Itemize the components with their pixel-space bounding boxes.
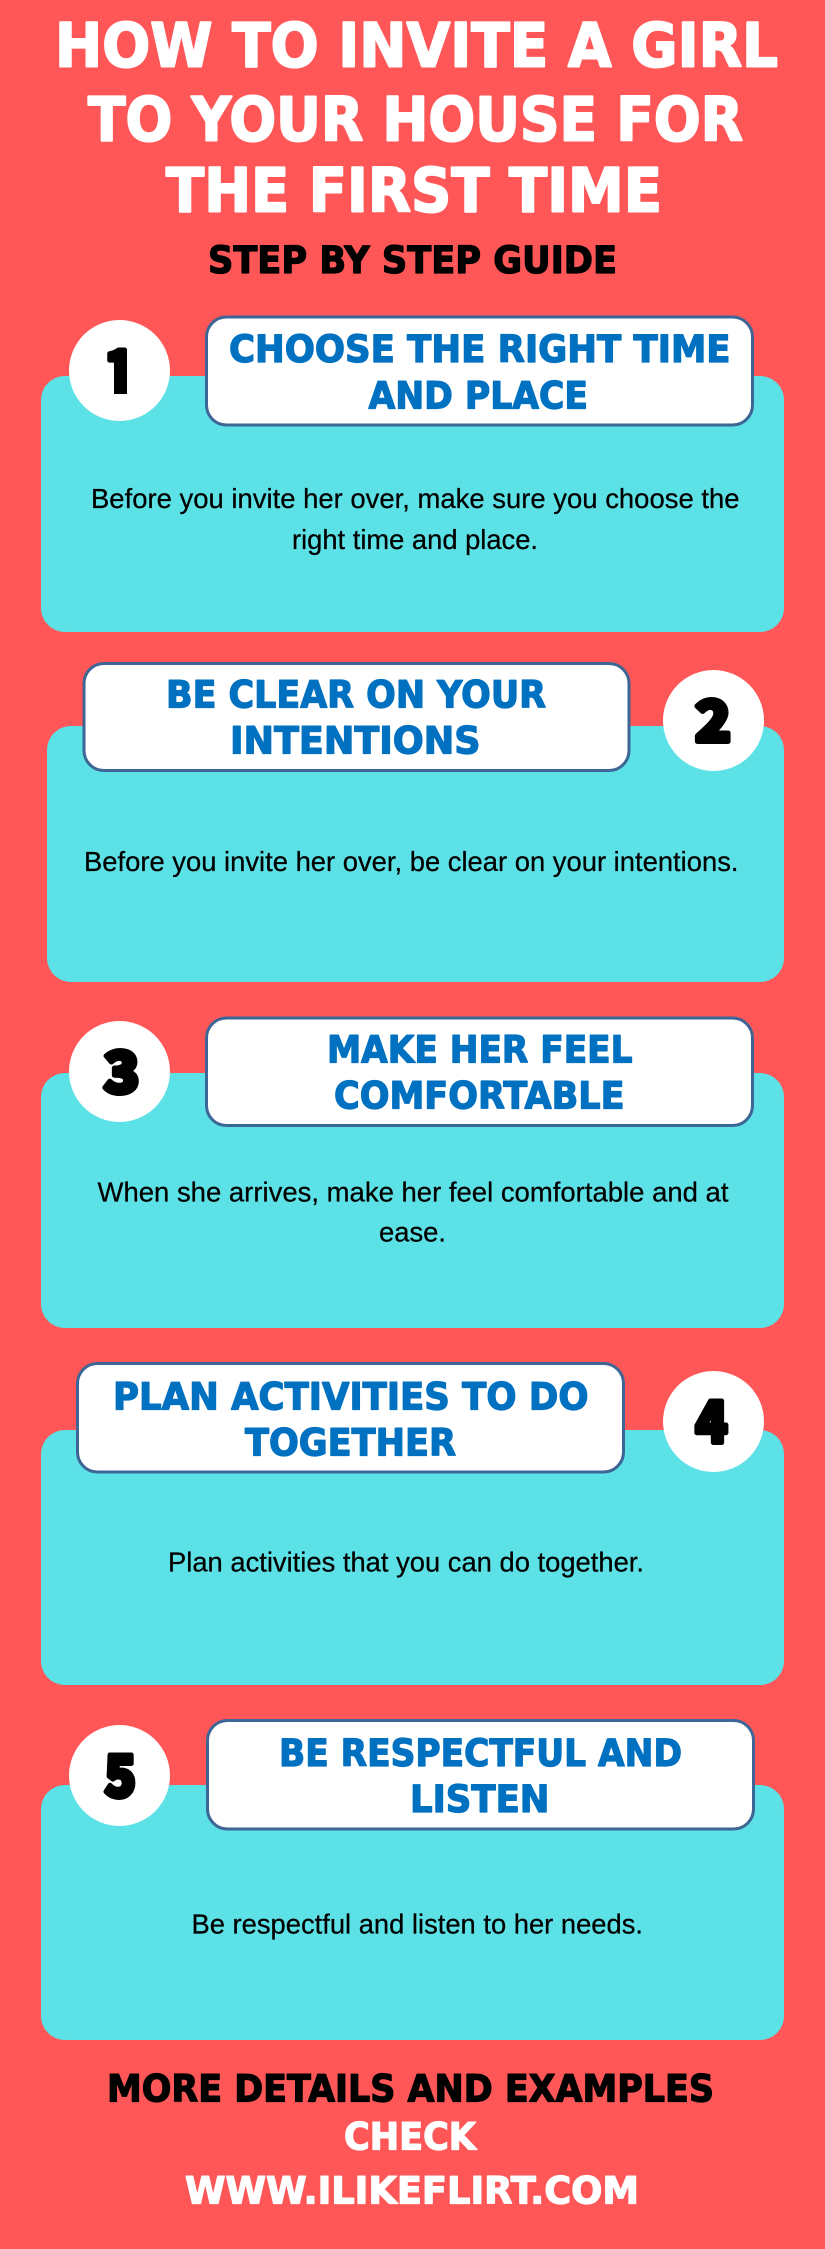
heading box 4: PLAN ACTIVITIES TO DO <box>113 1374 588 1418</box>
title: HOW TO INVITE A GIRL <box>55 12 778 82</box>
heading box 3: COMFORTABLE <box>334 1074 624 1118</box>
footer: more details: MORE DETAILS AND EXAMPLES <box>107 2066 714 2110</box>
number badge 2 <box>663 670 764 771</box>
footer: check: CHECK <box>344 2114 478 2158</box>
body text 4: Plan activities that you can do together. <box>168 1546 644 1578</box>
panel: step 1 <box>41 317 784 632</box>
number badge 4: 4 <box>696 1378 728 1460</box>
number badge 4 <box>663 1371 764 1472</box>
heading box 3: MAKE HER FEEL <box>327 1028 632 1072</box>
heading box 2: BE CLEAR ON YOUR <box>166 672 546 716</box>
heading box 4 <box>78 1364 624 1472</box>
number badge 5: 5 <box>104 1732 136 1814</box>
panel: step 4 <box>41 1364 784 1685</box>
body text 3: When she arrives, make her feel comfortable and at <box>98 1176 729 1208</box>
footer: website: WWW.ILIKEFLIRT.COM <box>185 2168 639 2212</box>
heading box 1: AND PLACE <box>368 374 588 418</box>
panel: step 2 <box>47 664 784 982</box>
subtitle: STEP BY STEP GUIDE <box>208 238 617 282</box>
number badge 3: 3 <box>104 1028 140 1110</box>
title <box>55 12 778 226</box>
panel: step 5 <box>41 1720 784 2040</box>
heading box 1 <box>206 317 752 425</box>
title: THE FIRST TIME <box>166 156 662 226</box>
body text 5: Be respectful and listen to her needs. <box>192 1908 643 1940</box>
heading box 1: CHOOSE THE RIGHT TIME <box>229 327 730 371</box>
number badge 1 <box>69 320 170 421</box>
heading box 5: BE RESPECTFUL AND <box>279 1731 682 1775</box>
heading box 2 <box>84 664 629 770</box>
body text 1 <box>91 483 740 555</box>
heading box 4: TOGETHER <box>245 1420 456 1464</box>
number badge 2: 2 <box>695 676 731 758</box>
number badge 3 <box>69 1021 170 1122</box>
heading box 2: INTENTIONS <box>230 718 480 762</box>
body text 3 <box>98 1176 729 1248</box>
body text 1: Before you invite her over, make sure you choose the <box>91 483 740 514</box>
number badge 1: 1 <box>104 326 134 408</box>
heading box 5: LISTEN <box>410 1777 550 1821</box>
body text 3: ease. <box>379 1216 446 1248</box>
panel: step 3 <box>41 1018 784 1328</box>
body text 1: right time and place. <box>292 524 538 555</box>
heading box 5 <box>208 1720 754 1829</box>
heading box 3 <box>206 1018 752 1126</box>
title: TO YOUR HOUSE FOR <box>88 86 743 156</box>
body text 2: Before you invite her over, be clear on your intentions. <box>84 846 738 877</box>
number badge 5 <box>69 1725 170 1826</box>
